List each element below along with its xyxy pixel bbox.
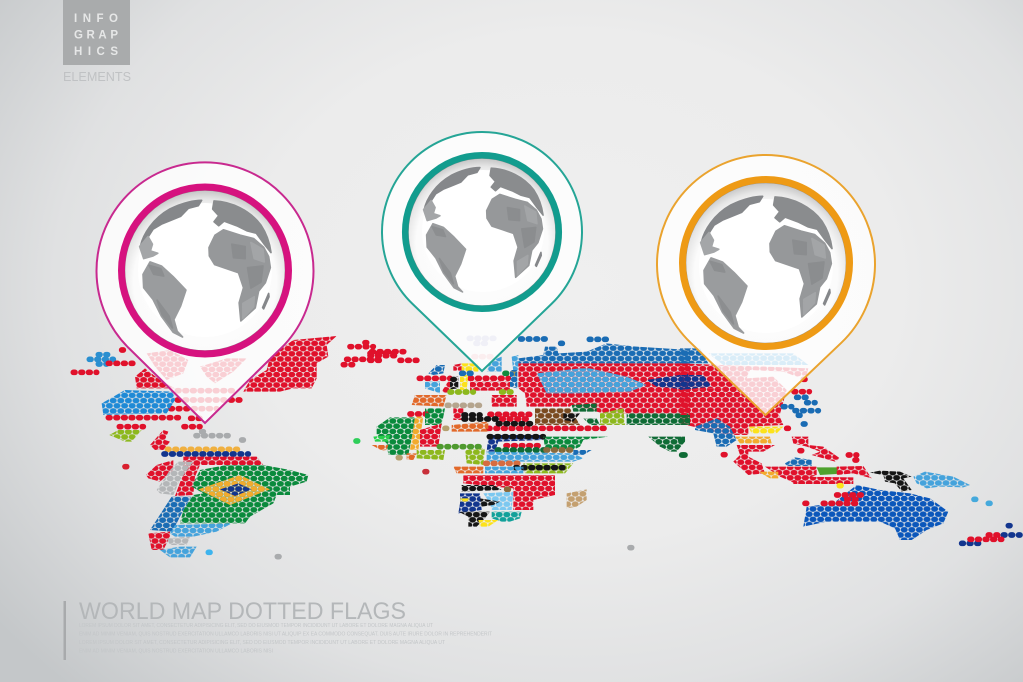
body text: ENIM AD MINIM VENIAM, QUIS NOSTRUD EXERCITATION ULLAMCO LABORIS NISI [79,648,273,654]
Europe dots [410,338,608,432]
body text: ENIM AD MINIM VENIAM, QUIS NOSTRUD EXERCITATION ULLAMCO LABORIS NISI UT ALIQUIP EX EA COMMODO CONSEQUAT. DUIS AUTE IRURE DOLOR IN REPREHENDERIT [79,632,493,638]
map: East Asia and Oceania dotted flags [680,348,1020,543]
logo text: HICS [74,46,118,58]
pin: teal globe marker [382,132,582,371]
Iceland and North Atlantic dots [356,352,422,441]
pin: orange globe marker [657,155,875,415]
pin disc [124,190,286,351]
Africa dots [372,417,635,548]
pin body [97,162,314,423]
pin ring [405,155,559,309]
pin ring [682,180,850,346]
logo text [74,13,118,58]
pin ring [122,187,288,354]
map: Europe, Africa and Asia dotted flags [356,338,690,548]
Southeast Asia dots [758,437,872,486]
caption block [64,598,493,660]
pin body [382,132,582,371]
caption rule [64,601,66,660]
pin body [657,155,875,415]
Oceania dots [803,471,1020,543]
pin disc [686,182,846,344]
pin disc [408,158,556,306]
logo text: GRAP [74,30,118,42]
Russia and Central Asia dots [512,339,690,455]
East Asia dots [680,348,818,475]
logo text: INFO [74,13,118,25]
North America dots [73,336,400,442]
globe [422,168,544,292]
globe [138,200,272,337]
body text: LOREM IPSUM DOLOR SIT AMET, CONSECTETUR ADIPISICING ELIT, SED DO EIUSMOD TEMPOR INCIDIDUNT UT LABORE ET DOLORE MAGNA ALIQUA UT [79,640,446,646]
logo caption: ELEMENTS [63,69,131,84]
body text: LOREM IPSUM DOLOR SIT AMET, CONSECTETUR ADIPISICING ELIT, SED DO EIUSMOD TEMPOR INCIDIDUNT UT LABORE ET DOLORE MAGNA ALIQUA UT [79,623,433,629]
Central America dots [150,430,248,454]
logo tile [63,0,130,65]
heading: WORLD MAP DOTTED FLAGS [79,598,406,625]
body text [79,623,493,654]
South America dots [125,457,308,557]
map: Americas dotted flags [73,336,400,557]
pin: magenta globe marker [97,162,314,423]
logo: infographics elements [63,0,131,84]
globe [699,196,833,333]
